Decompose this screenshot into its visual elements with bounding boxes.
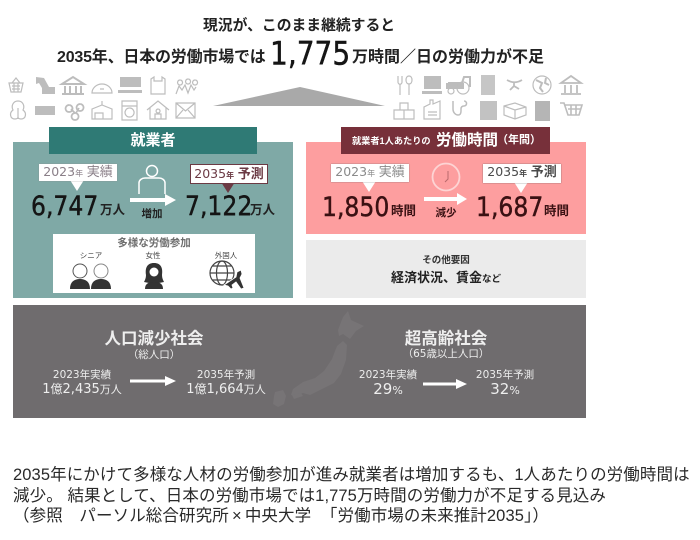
callout tail	[221, 182, 235, 193]
value: 1,687	[476, 191, 543, 223]
icon: washing machine	[122, 101, 137, 120]
footnote line 1: 2035年にかけて多様な人材の労働参加が進み就業者は増加するも、1人あたりの労働時間は	[13, 466, 690, 484]
diverse participation box	[53, 234, 255, 293]
icon: basket	[9, 78, 23, 92]
heading suffix: （年間）	[497, 134, 541, 146]
icon: calculator	[535, 101, 550, 121]
caption: その他要因	[422, 255, 470, 266]
label: 2035年予測	[197, 369, 255, 381]
map of Japan	[13, 305, 586, 418]
pyramid shape	[213, 87, 385, 106]
increase label: 増加	[142, 208, 162, 220]
2035 value	[476, 369, 534, 398]
value: 32%	[490, 380, 520, 398]
unit: 万人	[250, 203, 275, 217]
label: foreigners: 外国人	[215, 251, 237, 260]
panel: working hours	[306, 127, 586, 234]
unit: 時間	[391, 204, 416, 218]
panel background	[13, 142, 293, 298]
icon: clock	[432, 162, 460, 192]
icon: shopping cart	[560, 103, 582, 118]
callout label	[190, 164, 268, 184]
icon: fork and spoon	[398, 76, 412, 95]
callout: 2023 actual	[38, 164, 118, 191]
2023 value	[42, 369, 122, 397]
icon: woman	[144, 263, 164, 289]
icon: box	[504, 103, 526, 119]
subheading: （65歳以上人口）	[403, 348, 489, 360]
icon: helmet	[92, 84, 112, 93]
icon: tractor	[446, 77, 470, 94]
headline tail text: 万時間／日の労働力が不足	[352, 49, 544, 66]
callout label: 2035年 予測	[487, 164, 557, 179]
icon: person	[138, 164, 166, 194]
icon: laptop	[118, 77, 142, 93]
icon: trees	[11, 101, 25, 119]
decrease label: 減少	[436, 207, 456, 219]
shortage figure: 1,775	[270, 34, 350, 72]
icon grid and pyramid	[8, 75, 584, 121]
icon: tools	[507, 80, 522, 90]
factors text: 経済状況、賃金など	[391, 270, 501, 285]
figure: 2035 hours	[476, 191, 569, 223]
panel: society	[13, 305, 586, 418]
headline line 2	[57, 34, 544, 72]
label: women: 女性	[146, 251, 160, 260]
panel heading	[341, 127, 550, 154]
icon: stethoscope	[453, 101, 467, 115]
heading: 人口減少社会	[104, 330, 204, 348]
footnote line 3: （参照 パーソル総合研究所 中央大学 「労働市場の未来推計2035」）	[13, 507, 549, 525]
label: 2023年実績	[53, 369, 111, 381]
figure: 2035 workers	[185, 190, 275, 222]
footnote line 3: ×	[232, 507, 242, 525]
callout tail	[362, 181, 376, 192]
icon: shopping bag	[151, 77, 165, 94]
subheading: （総人口）	[128, 349, 180, 361]
unit: 時間	[544, 204, 569, 218]
icon: office building	[480, 101, 497, 120]
icon: molecules	[66, 104, 84, 120]
heading: 超高齢社会	[405, 330, 487, 348]
callout label: 2023年 実績	[335, 164, 405, 179]
callout tail	[514, 182, 528, 193]
headline	[57, 17, 544, 72]
label: 2035年予測	[476, 369, 534, 381]
unit: 万人	[100, 203, 125, 217]
callout label: 2035年 予測	[194, 166, 264, 181]
value: 1億2,435万人	[42, 382, 122, 397]
icon: factory	[424, 100, 440, 119]
arrow: decrease	[424, 193, 467, 205]
headline line 1: 現況が、このまま継続すると	[203, 18, 395, 34]
callout tail	[70, 180, 84, 191]
icon: excavator	[36, 77, 55, 94]
2035 value	[186, 369, 266, 397]
block: super-aged society	[359, 330, 534, 398]
headline lead text: 2035年、日本の労働市場では	[57, 49, 266, 66]
callout label: 2023年 実績	[43, 164, 113, 179]
callout: 2023 actual	[330, 163, 410, 192]
figure: 2023 hours	[322, 191, 416, 223]
arrow: increase	[130, 194, 176, 206]
icon: envelope	[176, 103, 195, 118]
arrow: aging	[423, 379, 467, 389]
icon: globe and plane	[209, 260, 244, 288]
value: 6,747	[31, 190, 98, 222]
panel background	[306, 142, 586, 234]
value: 29%	[373, 380, 403, 398]
icon: document	[481, 75, 495, 95]
value: 1,850	[322, 191, 389, 223]
icon: pillar building	[561, 76, 581, 94]
icon: bank building	[62, 77, 84, 94]
icon: school	[394, 103, 414, 119]
label: 2023年実績	[359, 369, 417, 381]
icon: home	[147, 101, 169, 119]
panel heading: 就業者	[130, 132, 176, 149]
label: seniors: シニア	[80, 251, 102, 260]
panel: other factors	[306, 240, 586, 298]
callout: 2035 forecast	[190, 164, 268, 193]
icon: desk house	[92, 101, 112, 119]
footnote line 2: 減少。 結果として、日本の労働市場では1,775万時間の労働力が不足する見込み	[13, 487, 606, 505]
icon: globe	[533, 76, 551, 94]
footnote text	[13, 466, 690, 525]
panel: workers	[13, 127, 293, 298]
icon: computer	[422, 76, 442, 94]
icon: seniors	[70, 264, 111, 289]
heading small text: 就業者1人あたりの	[352, 136, 431, 146]
heading emphasis: 労働時間	[436, 132, 498, 149]
panel heading	[49, 127, 257, 154]
figure: 2023 workers	[31, 190, 125, 222]
icon: air conditioner	[35, 106, 55, 115]
arrow: population	[130, 376, 176, 386]
callout: 2035 forecast	[482, 163, 562, 193]
box heading: 多様な労働参加	[117, 237, 191, 249]
icon: people group	[176, 79, 198, 94]
value: 1億1,664万人	[186, 382, 266, 397]
value: 7,122	[185, 190, 252, 222]
block: shrinking population	[42, 330, 266, 397]
2023 value	[359, 369, 417, 398]
